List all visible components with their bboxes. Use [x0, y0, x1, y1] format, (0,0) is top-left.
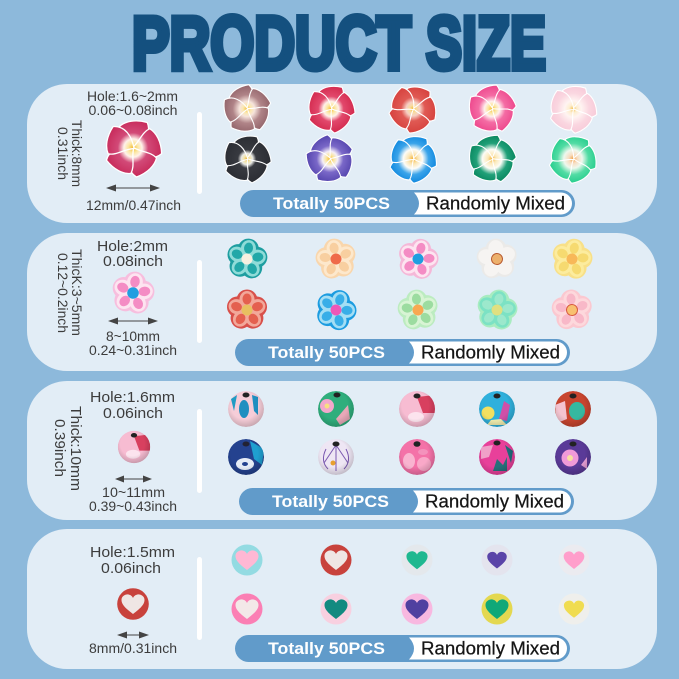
- thickness label: Thick:8mm: [69, 120, 84, 187]
- flower grid: [221, 233, 599, 339]
- width arrow: [115, 476, 152, 482]
- quantity pill: Randomly Mixed: [421, 342, 560, 362]
- hole size label: Hole:1.6~2mm: [87, 89, 178, 104]
- sample flower: [105, 268, 160, 321]
- title: PRODUCT: [132, 1, 411, 85]
- quantity pill: Totally 50PCS: [268, 639, 385, 658]
- divider: [197, 112, 202, 194]
- hole size in inches: 0.08inch: [103, 253, 163, 270]
- flower grid: [216, 77, 605, 195]
- width arrow: [117, 632, 149, 638]
- quantity pill: [240, 190, 575, 217]
- quantity pill: [235, 635, 570, 662]
- bead grid: [228, 391, 591, 475]
- width label: 8mm/0.31inch: [89, 641, 177, 656]
- width arrow: [106, 184, 160, 192]
- hole size label: Hole:2mm: [97, 238, 168, 255]
- quantity pill: Randomly Mixed: [425, 492, 564, 512]
- bead grid: [232, 544, 590, 624]
- sample bead: [118, 431, 150, 463]
- hole size in inches: 0.06~0.08inch: [88, 103, 178, 118]
- quantity pill: Totally 50PCS: [273, 194, 390, 213]
- divider: [197, 409, 202, 493]
- hole size in inches: 0.06inch: [101, 560, 161, 577]
- divider: [197, 260, 202, 343]
- sample flower: [96, 115, 168, 185]
- panel: plumeria flower beads: [27, 77, 657, 223]
- quantity pill: Randomly Mixed: [426, 194, 565, 214]
- thickness in inches: 0.12~0.2inch: [55, 253, 70, 333]
- width label: 8~10mm: [106, 329, 160, 344]
- divider: [197, 557, 202, 640]
- width label: 10~11mm: [102, 485, 165, 500]
- panel: heart beads: [27, 529, 657, 669]
- quantity pill: Randomly Mixed: [421, 638, 560, 658]
- hole size label: Hole:1.5mm: [90, 544, 175, 561]
- hole size label: Hole:1.6mm: [90, 389, 175, 406]
- hole size in inches: 0.06inch: [103, 405, 163, 422]
- quantity pill: [239, 488, 574, 515]
- quantity pill: Totally 50PCS: [268, 343, 385, 362]
- width label: 12mm/0.47inch: [86, 198, 181, 213]
- thickness label: Thick:10mm: [67, 406, 84, 491]
- quantity pill: [235, 339, 570, 366]
- sample bead: [117, 588, 149, 620]
- panel: round floral beads: [27, 381, 657, 520]
- width arrow: [108, 318, 158, 324]
- quantity pill: Totally 50PCS: [272, 492, 389, 511]
- thickness in inches: 0.39inch: [51, 419, 68, 477]
- thickness in inches: 0.31inch: [55, 127, 70, 180]
- thickness label: ThicK:3~5mm: [69, 249, 84, 336]
- width in inches: 0.39~0.43inch: [89, 499, 177, 514]
- title: SIZE: [426, 1, 546, 85]
- panel: five-petal slice beads: [27, 233, 657, 371]
- width in inches: 0.24~0.31inch: [89, 343, 177, 358]
